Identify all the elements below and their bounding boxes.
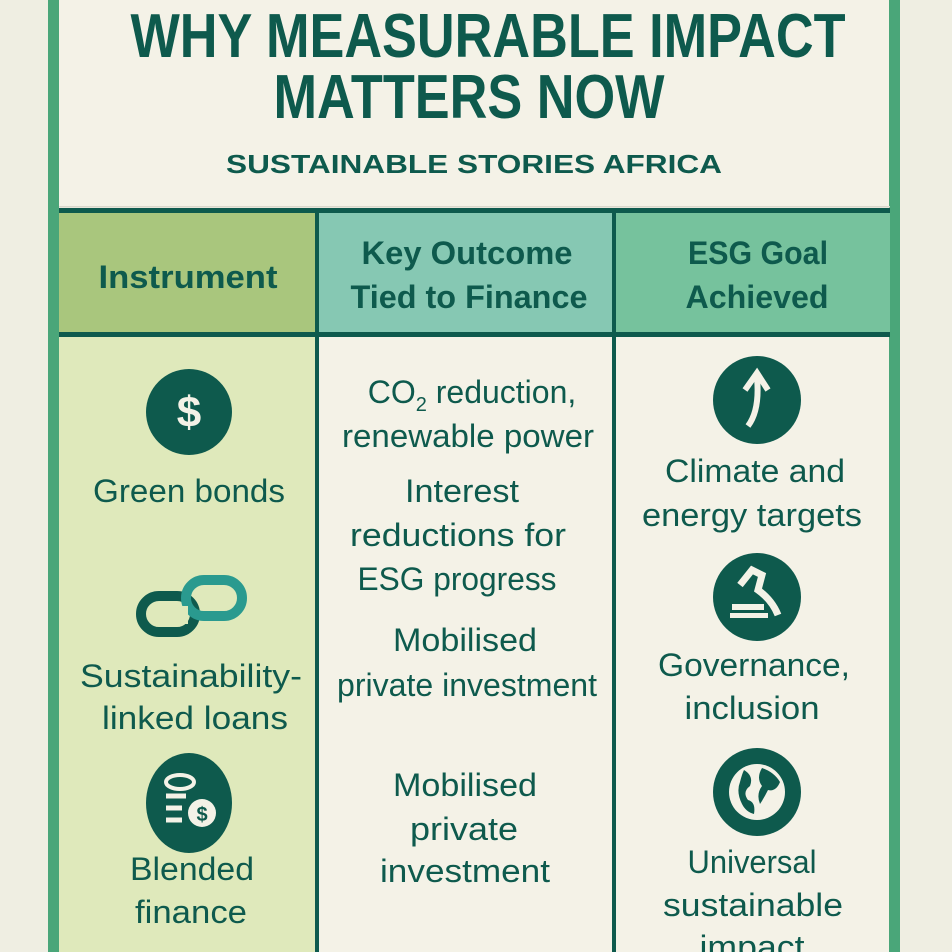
text: universal: Universal xyxy=(688,844,816,880)
text: mobilised private investment 2: private xyxy=(410,811,518,847)
text: interest reductions: Interest xyxy=(405,473,519,509)
text: mobilised private investment 2: investment xyxy=(380,853,550,889)
icon: chain xyxy=(141,580,242,632)
text: sustainability-linked loans: Sustainability- xyxy=(80,658,302,694)
text: sustainability-linked loans: linked loans xyxy=(102,700,288,736)
table backgrounds xyxy=(59,206,890,952)
icon: dollar: $ xyxy=(177,388,201,437)
text: governance xyxy=(658,647,850,726)
icon: globe xyxy=(713,748,801,836)
text: mobilised private investment 1: Mobilised xyxy=(393,622,537,658)
text: mobilised private investment 2: Mobilised xyxy=(393,767,537,803)
header: key outcome: Key Outcome xyxy=(362,235,572,271)
text: mobilised private investment 2 xyxy=(380,767,550,889)
header: esg goal: Achieved xyxy=(686,279,828,315)
icon: gavel xyxy=(713,553,801,641)
text: climate and energy: Climate and xyxy=(665,453,845,489)
text: co2 reduction xyxy=(342,374,594,454)
title xyxy=(130,2,846,132)
header: esg goal: ESG Goal xyxy=(688,235,828,271)
text: universal: sustainable xyxy=(663,887,843,923)
header: key outcome xyxy=(350,235,588,315)
text: co2 reduction: 2 xyxy=(416,394,427,416)
text: climate and energy: energy targets xyxy=(642,497,862,533)
text: governance: Governance, xyxy=(658,647,850,683)
text: sustainability-linked loans xyxy=(80,658,302,736)
title: MATTERS NOW xyxy=(274,63,665,132)
text: blended finance: Blended xyxy=(130,851,254,887)
icon: coins xyxy=(146,753,232,853)
text: universal xyxy=(663,844,843,952)
text: co2 reduction: reduction, xyxy=(427,374,576,410)
text: mobilised private investment 1: private investment xyxy=(337,667,597,703)
text: green bonds: Green bonds xyxy=(93,473,285,509)
text: interest reductions xyxy=(350,473,566,597)
text: co2 reduction: renewable power xyxy=(342,418,594,454)
icon: coins: $ xyxy=(196,804,208,826)
text: governance: inclusion xyxy=(684,690,820,726)
text: mobilised private investment 1 xyxy=(337,622,597,703)
text: interest reductions: ESG progress xyxy=(358,561,556,597)
subtitle: SUSTAINABLE STORIES AFRICA xyxy=(226,149,722,179)
header: instrument: Instrument xyxy=(98,259,278,295)
text: co2 reduction: CO xyxy=(368,374,416,410)
header: key outcome: Tied to Finance xyxy=(350,279,588,315)
text: blended finance xyxy=(130,851,254,930)
header: esg goal xyxy=(686,235,828,315)
text: blended finance: finance xyxy=(135,894,247,930)
text: climate and energy xyxy=(642,453,862,533)
text: interest reductions: reductions for xyxy=(350,517,566,553)
icon: arrow up xyxy=(713,356,801,444)
icon: dollar xyxy=(146,369,232,455)
